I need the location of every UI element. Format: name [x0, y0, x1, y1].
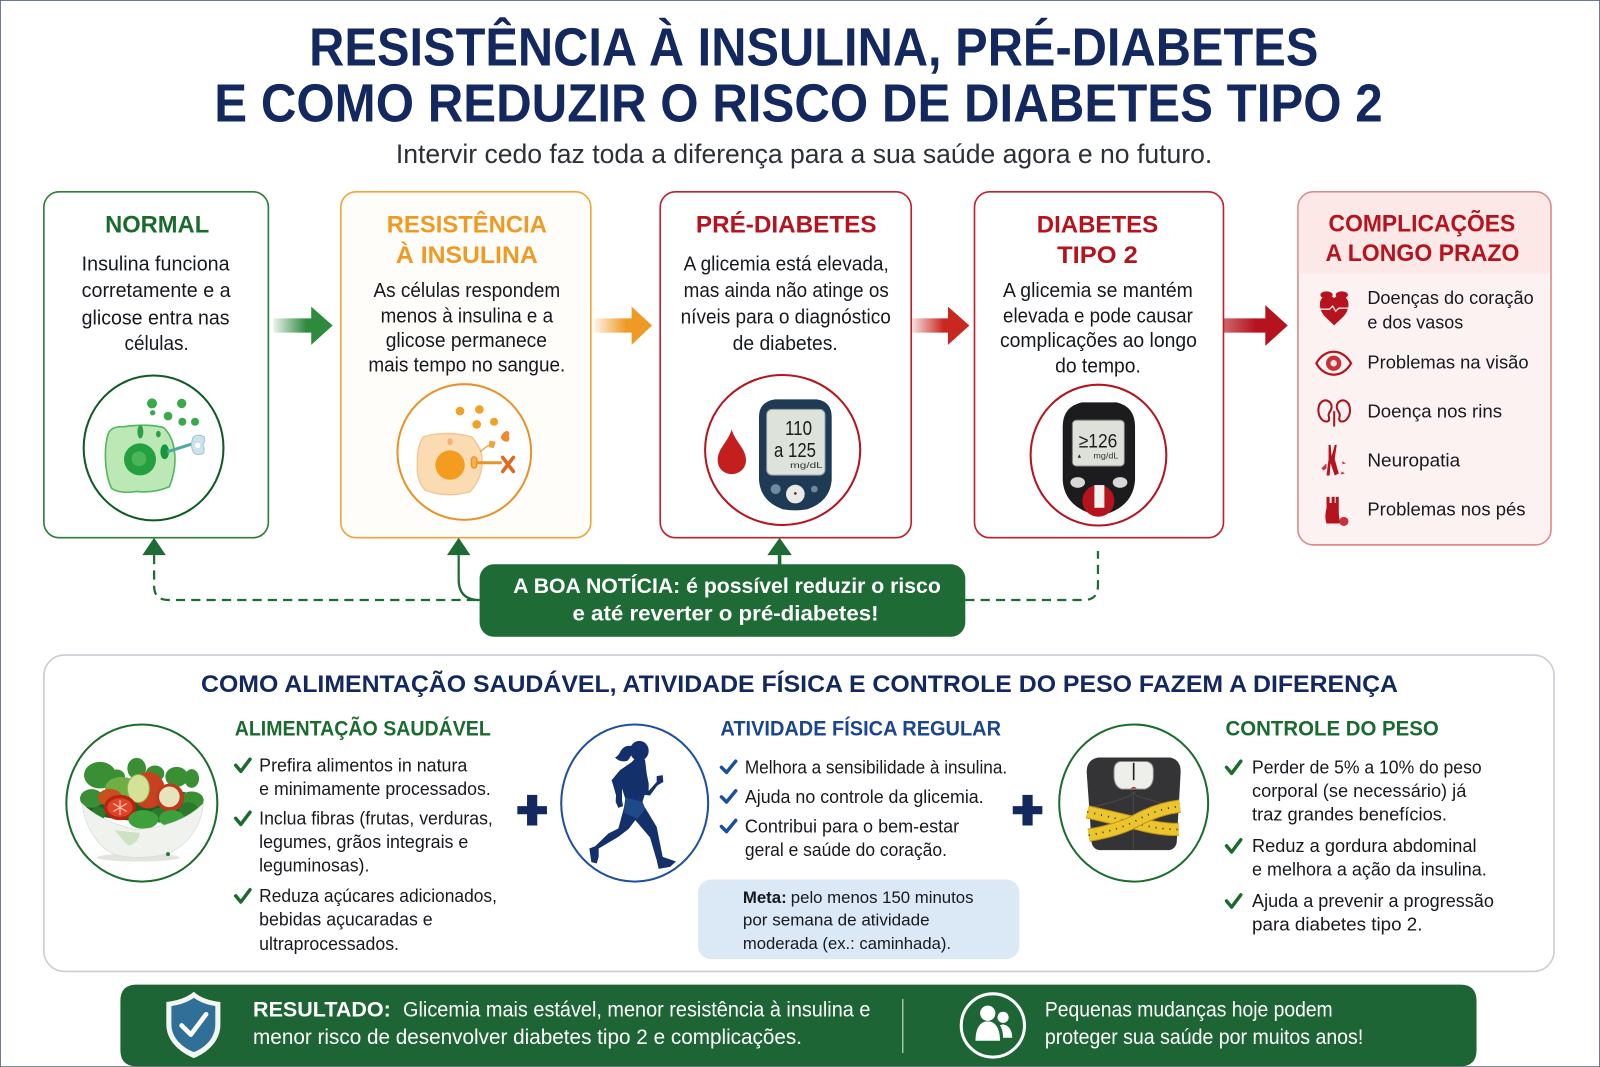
checklist: weight control: para diabetes tipo 2.: [1252, 914, 1422, 935]
heading: weight control: CONTROLE DO PESO: [1226, 718, 1439, 741]
text: diabetes description: A glicemia se mantém: [1003, 280, 1193, 302]
text: result: [253, 998, 870, 1049]
item: kidney disease: Doença nos rins: [1367, 400, 1502, 421]
text: closing message: proteger sua saúde por muitos anos!: [1045, 1026, 1363, 1049]
checklist: weight control: [1227, 756, 1494, 935]
text: normal description: células.: [124, 333, 189, 355]
checklist: healthy eating: leguminosas).: [259, 854, 369, 875]
text: normal description: glicose entra nas: [82, 307, 230, 329]
heading: insulin resistance: [387, 211, 547, 269]
checklist: weight control: corporal (se necessário) já: [1252, 780, 1467, 801]
panel: how lifestyle makes a difference: [44, 655, 1554, 971]
text: prediabetes description: de diabetes.: [733, 333, 838, 355]
text: resistance description: As células respondem: [373, 280, 560, 302]
text: normal description: [82, 253, 232, 355]
arrow: from diabetes dashed: [965, 551, 1098, 600]
arrow: resistance to prediabetes: [594, 307, 652, 345]
checklist: healthy eating: e minimamente processados.: [259, 778, 491, 799]
item: neuropathy: Neuropatia: [1367, 449, 1461, 470]
arrow: back to normal: [142, 538, 480, 600]
text: prediabetes description: mas ainda não atinge os: [684, 280, 889, 302]
text: physical activity: [698, 718, 1019, 959]
icon: salad bowl: [66, 724, 217, 882]
checklist: physical activity: Melhora a sensibilidade à insulina.: [745, 756, 1007, 777]
checklist: healthy eating: ultraprocessados.: [259, 933, 399, 954]
checklist: weight control: Reduz a gordura abdominal: [1252, 835, 1477, 856]
heading: complications: COMPLICAÇÕES: [1329, 210, 1515, 238]
text: result: menor risco de desenvolver diabetes tipo 2 e complicações.: [253, 1026, 802, 1049]
icon: glucose meter 126: [1031, 385, 1166, 525]
text: resistance description: glicose permanece: [386, 330, 547, 352]
checklist: physical activity: Contribui para o bem-estar: [745, 816, 959, 837]
callout: good news: e até reverter o pré-diabetes!: [572, 601, 879, 625]
icon: plus: [517, 795, 547, 825]
icon: glucose meter 110 a 125: 110: [785, 417, 812, 440]
text: result: RESULTADO:: [253, 998, 391, 1021]
panel: long-term complications: [1298, 192, 1551, 545]
checklist: physical activity: [721, 756, 1007, 860]
text: resistance description: [368, 280, 565, 376]
checklist: weight control: traz grandes benefícios.: [1252, 803, 1447, 824]
checklist: weight control: e melhora a ação da insulina.: [1252, 858, 1487, 879]
icon: bathroom scale with tape: [1059, 724, 1208, 882]
text: prediabetes description: níveis para o diagnóstico: [681, 306, 891, 328]
text: diabetes description: [1000, 280, 1197, 377]
text: result: Glicemia mais estável, menor resistência à insulina e: [403, 998, 870, 1021]
icon: resistant cell: [397, 384, 531, 520]
text: healthy eating: [235, 718, 497, 954]
text: diabetes description: elevada e pode causar: [1003, 305, 1193, 327]
icon: plus: [1013, 795, 1042, 825]
heading: healthy eating: ALIMENTAÇÃO SAUDÁVEL: [235, 718, 491, 741]
icon: glucose meter 110 a 125: a 125: [774, 439, 816, 462]
checklist: healthy eating: Inclua fibras (frutas, verduras,: [259, 807, 493, 828]
subtitle: Intervir cedo faz toda a diferença para a sua saúde agora e no futuro.: [396, 139, 1212, 169]
checklist: weight control: Ajuda a prevenir a progressão: [1252, 890, 1494, 911]
text: diabetes description: do tempo.: [1055, 355, 1141, 377]
panel: insulin resistance: [341, 192, 591, 538]
icon: shield: [166, 992, 220, 1058]
icon: healthy cell with insulin key: [84, 375, 223, 520]
heading: lifestyle: COMO ALIMENTAÇÃO SAUDÁVEL, ATIVIDADE FÍSICA E CONTROLE DO PESO FAZEM A DIFERENÇA: [201, 670, 1398, 698]
icon: people: [961, 994, 1024, 1057]
text: resistance description: mais tempo no sangue.: [368, 354, 565, 376]
checklist: physical activity: geral e saúde do coração.: [745, 839, 947, 860]
heading: type 2 diabetes: [1037, 212, 1158, 269]
heading: complications: A LONGO PRAZO: [1326, 240, 1519, 267]
checklist: weight control: Perder de 5% a 10% do peso: [1252, 756, 1482, 777]
text: prediabetes description: A glicemia está elevada,: [684, 253, 889, 275]
heading: normal: NORMAL: [105, 212, 209, 239]
icon: glucose meter 126: mg/dL: [1093, 451, 1119, 460]
panel: prediabetes: [660, 192, 911, 538]
checklist: healthy eating: [236, 754, 497, 954]
item: neuropathy: [1321, 445, 1461, 475]
text: normal description: corretamente e a: [82, 280, 232, 302]
item: vision problems: [1316, 351, 1529, 375]
callout: good news: A BOA NOTÍCIA: é possível reduzir o risco: [513, 573, 941, 598]
icon: glucose meter 126: ≥126: [1079, 431, 1117, 452]
heading: insulin resistance: À INSULINA: [396, 241, 538, 269]
text: closing message: [1045, 998, 1363, 1049]
checklist: physical activity: Ajuda no controle da glicemia.: [745, 786, 984, 807]
callout: weekly goal: pelo menos 150 minutos: [791, 888, 973, 907]
heading: insulin resistance: RESISTÊNCIA: [387, 211, 547, 239]
item: foot problems: Problemas nos pés: [1367, 498, 1526, 519]
panel: type 2 diabetes: [974, 192, 1223, 538]
checklist: healthy eating: bebidas açucaradas e: [259, 908, 433, 929]
arrow: back to insulin resistance: [447, 538, 480, 600]
arrow: diabetes to complications: [1223, 305, 1288, 346]
text: resistance description: menos à insulina e a: [381, 305, 554, 327]
arrow: prediabetes to diabetes: [912, 307, 969, 345]
title: [214, 16, 1383, 133]
heading: type 2 diabetes: DIABETES: [1037, 212, 1158, 239]
callout: weekly goal: por semana de atividade: [743, 910, 930, 929]
item: heart disease: e dos vasos: [1367, 312, 1463, 333]
heading: physical activity: ATIVIDADE FÍSICA REGULAR: [720, 718, 1001, 741]
text: weight control: [1226, 718, 1494, 935]
checklist: healthy eating: Reduza açúcares adicionados,: [259, 885, 497, 906]
text: prediabetes description: [681, 253, 891, 355]
item: heart disease: Doenças do coração: [1367, 287, 1534, 308]
heading: type 2 diabetes: TIPO 2: [1057, 242, 1138, 269]
text: closing message: Pequenas mudanças hoje podem: [1045, 998, 1333, 1021]
icon: glucose meter 110 a 125: mg/dL: [790, 461, 823, 470]
arrow: normal to resistance: [273, 307, 333, 345]
callout: weekly goal: moderada (ex.: caminhada).: [743, 934, 951, 953]
callout: weekly goal: [698, 880, 1019, 959]
item: foot problems: [1325, 497, 1526, 526]
icon: runner: [561, 724, 708, 882]
callout: weekly goal: Meta:: [743, 888, 787, 907]
heading: complications: [1326, 210, 1519, 267]
checklist: healthy eating: legumes, grãos integrais e: [259, 831, 468, 852]
panel: result banner: [120, 985, 1477, 1066]
item: vision problems: Problemas na visão: [1367, 351, 1529, 372]
item: heart disease: [1320, 287, 1534, 333]
icon: glucose meter 110 a 125: [705, 375, 860, 525]
arrow: back to prediabetes: [767, 538, 792, 567]
title: RESISTÊNCIA À INSULINA, PRÉ-DIABETES: [309, 16, 1318, 77]
heading: prediabetes: PRÉ-DIABETES: [696, 211, 877, 239]
item: kidney disease: [1318, 400, 1502, 427]
title: E COMO REDUZIR O RISCO DE DIABETES TIPO 2: [214, 73, 1383, 133]
panel: normal: [44, 192, 268, 538]
text: diabetes description: complicações ao longo: [1000, 330, 1197, 352]
callout: good news: [480, 564, 965, 637]
checklist: healthy eating: Prefira alimentos in natura: [259, 754, 468, 775]
text: normal description: Insulina funciona: [82, 253, 231, 275]
